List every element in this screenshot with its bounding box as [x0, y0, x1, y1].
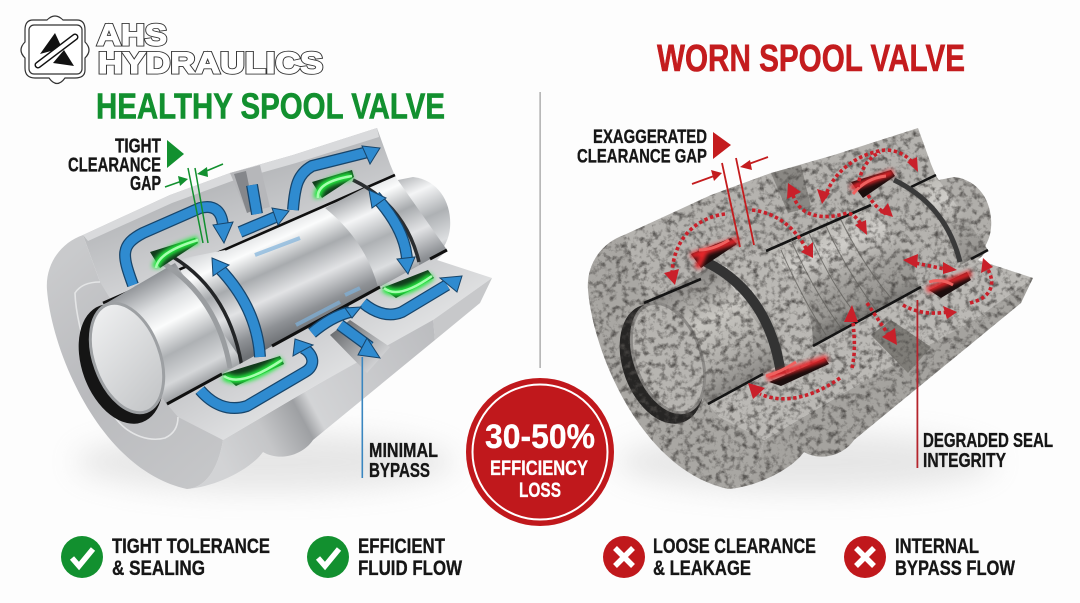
panel: healthy spool valve illustration	[47, 128, 492, 489]
problem: loose clearance and leakage	[603, 535, 816, 580]
benefit: efficient fluid flow	[307, 535, 462, 580]
logo wordmark: HYDRAULICS	[98, 47, 323, 80]
red dotted leakage arrows	[664, 150, 993, 399]
shadow under valves	[75, 432, 455, 492]
front seal ring	[63, 292, 179, 436]
front flange	[47, 235, 223, 489]
logo wordmark: AHS	[97, 19, 167, 52]
heading: worn spool valve: WORN SPOOL VALVE	[657, 38, 965, 80]
badge: 30-50% efficiency loss: EFFICIENCY	[490, 457, 588, 480]
black slit lower edge	[167, 250, 447, 404]
center divider	[540, 92, 541, 368]
benefit: efficient fluid flow: EFFICIENT	[358, 535, 445, 558]
logo wordmark	[97, 19, 323, 80]
logo wordmark: AHS	[97, 19, 167, 52]
seal gaps with green glow	[150, 170, 434, 386]
callout: minimal bypass: BYPASS	[369, 460, 430, 482]
spool back end	[368, 177, 450, 272]
flange inner step	[75, 282, 178, 439]
benefit: tight tolerance and sealing: & SEALING	[112, 557, 205, 580]
benefit: tight tolerance and sealing	[61, 535, 270, 580]
valve housing back half	[83, 128, 395, 303]
spool land right	[325, 186, 420, 287]
logo wordmark: HYDRAULICS	[98, 47, 323, 80]
spool front piston	[103, 263, 245, 405]
callout: exaggerated clearance gap: CLEARANCE GAP	[577, 146, 707, 168]
callout: degraded seal integrity	[916, 300, 1053, 472]
top port notch	[230, 165, 270, 213]
slits and worn seal rings	[644, 175, 988, 404]
callout: exaggerated clearance gap: EXAGGERATED	[593, 126, 707, 148]
spool body base	[103, 176, 447, 404]
badge: 30-50% efficiency loss: LOSS	[519, 479, 561, 502]
callout: tight clearance gap: CLEARANCE	[68, 154, 161, 176]
icon: hydraulic cylinder emblem	[21, 16, 89, 84]
problem: loose clearance and leakage: & LEAKAGE	[653, 557, 751, 580]
callout: degraded seal integrity: INTEGRITY	[923, 450, 1007, 472]
benefit: efficient fluid flow: FLUID FLOW	[358, 557, 462, 580]
faint blue flow marks on rod	[135, 238, 360, 402]
callout: tight clearance gap: TIGHT	[115, 136, 161, 158]
callout: tight clearance gap	[68, 136, 223, 243]
badge: 30-50% efficiency loss: 30-50%	[485, 418, 595, 456]
problem: loose clearance and leakage: LOOSE CLEARANCE	[653, 535, 816, 558]
blue flow arrows	[125, 146, 462, 408]
worn valve body with surface damage	[588, 128, 1033, 489]
problem: internal bypass flow: BYPASS FLOW	[895, 557, 1015, 580]
callout: exaggerated clearance gap	[577, 126, 768, 247]
badge: 30-50% efficiency loss	[466, 378, 614, 526]
spool front face	[76, 293, 178, 423]
upper slit line	[103, 175, 395, 303]
problem: internal bypass flow	[844, 535, 1015, 580]
bypass slot	[330, 320, 390, 373]
logo: AHS Hydraulics	[21, 16, 323, 84]
scratches on rod	[781, 220, 891, 335]
spool land left	[175, 250, 272, 370]
callout: minimal bypass: MINIMAL	[369, 440, 438, 462]
callout: tight clearance gap: GAP	[130, 173, 161, 195]
heading: healthy spool valve: HEALTHY SPOOL VALVE	[96, 86, 445, 126]
damaged seal gaps with red glow	[691, 170, 971, 386]
callout: minimal bypass	[362, 357, 438, 482]
benefit: tight tolerance and sealing: TIGHT TOLERANCE	[112, 535, 270, 558]
lower housing cut face	[167, 250, 492, 440]
housing lower side and block	[187, 318, 435, 489]
problem: internal bypass flow: INTERNAL	[895, 535, 979, 558]
panel: worn spool valve illustration	[588, 128, 1033, 489]
